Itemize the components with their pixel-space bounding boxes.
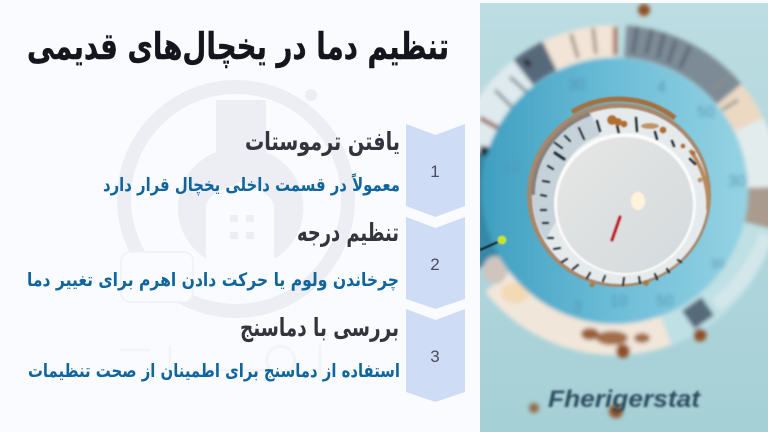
rust on stripes — [529, 4, 706, 418]
faint dial numerals: 50 — [656, 293, 674, 310]
stripe dividers — [480, 27, 738, 152]
knob highlight — [631, 192, 645, 210]
step 1 description: معمولاً در قسمت داخلی یخچال قرار دارد — [103, 172, 400, 196]
step 1 chevron — [406, 124, 465, 217]
faint dial numerals: 3 — [573, 299, 582, 316]
faint dial numerals: 30 — [568, 77, 586, 94]
indicator light — [480, 236, 506, 250]
ring ticks — [541, 118, 695, 285]
red needle — [612, 217, 620, 240]
outer dial stripes — [466, 41, 764, 339]
pale faded arc — [716, 235, 766, 305]
step 2 chevron — [406, 217, 465, 309]
blue dial disc — [482, 58, 748, 324]
knob — [554, 133, 696, 275]
step 2 number: 2 — [430, 255, 440, 274]
step 3 description: استفاده از دماسنج برای اطمینان از صحت تنظیمات — [28, 361, 400, 382]
thermostat photo — [466, 3, 768, 432]
step 3 heading: بررسی با دماسنج — [240, 313, 399, 343]
blurred label text: Fherigerstat — [548, 386, 701, 413]
faint dial numerals: 30 — [710, 256, 724, 271]
step 2 description: چرخاندن ولوم یا حرکت دادن اهرم برای تغییر دما — [27, 270, 399, 291]
dark square marker — [682, 297, 714, 329]
lower left glow — [483, 256, 529, 303]
selector ring — [527, 99, 711, 288]
faint dial numerals: 4 — [657, 79, 666, 96]
faint dial numerals: 30 — [728, 173, 746, 190]
step 3 number: 3 — [430, 347, 440, 366]
watermark logo — [120, 87, 348, 380]
faint dial numerals: 10 — [503, 159, 521, 176]
faint dial numerals: 10 — [610, 293, 628, 310]
rust spots — [590, 115, 702, 288]
step 2 heading: تنظیم درجه — [297, 218, 399, 247]
faint dial numerals: 50 — [697, 104, 715, 121]
step 1 heading: یافتن ترموستات — [245, 127, 400, 157]
title: تنظیم دما در یخچال‌های قدیمی — [27, 25, 449, 68]
step 1 number: 1 — [430, 162, 440, 181]
step 3 chevron — [406, 309, 465, 402]
faint dial numerals — [572, 80, 746, 311]
